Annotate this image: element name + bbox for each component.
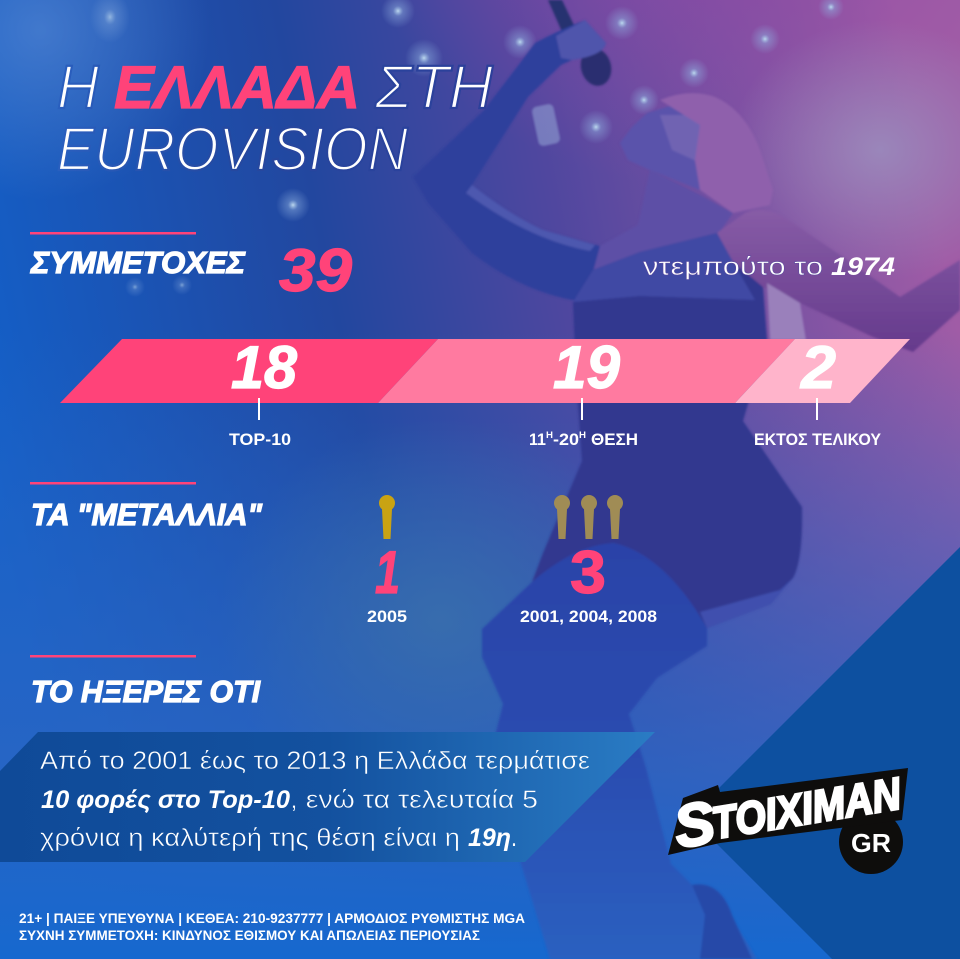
callout: did you know fact — [0, 732, 655, 862]
title: first line: ΣΤΗ — [374, 53, 494, 121]
right arm and hand — [717, 210, 960, 352]
heading: did you know: ΤΟ ΗΞΕΡΕΣ ΟΤΙ — [31, 674, 261, 709]
segment: out of final — [735, 339, 910, 403]
title: first line: ΕΛΛΑΔΑ — [114, 54, 360, 121]
skirt hem — [700, 578, 793, 628]
icons: bronze microphones — [554, 495, 623, 539]
raised arm — [413, 20, 606, 300]
bar labels — [229, 398, 881, 449]
logo: Stoiximan GR: TOIXIMAN — [708, 768, 905, 849]
responsible gaming footer — [19, 911, 525, 943]
callout: did you know fact: χρόνια η καλύτερή της θέση είναι η — [40, 824, 460, 852]
debut note: ντεμπούτο το — [643, 253, 823, 281]
label: out of final: ΕΚΤΟΣ ΤΕΛΙΚΟΥ — [754, 431, 881, 449]
dress — [532, 233, 802, 628]
dress lace — [767, 283, 806, 340]
label: 11th-20th place: ΘΕΣΗ — [591, 431, 638, 449]
singer silhouette — [413, 0, 960, 959]
title: first line — [57, 53, 494, 121]
debut note — [643, 253, 895, 281]
label: 11th-20th place: Η — [546, 430, 553, 441]
hand — [556, 20, 606, 60]
label: 11th-20th place: -20 — [553, 431, 579, 449]
participations count: 39 — [279, 237, 353, 304]
label: 11th-20th place: 11 — [529, 431, 546, 449]
title: first line: Η — [57, 53, 100, 121]
label: 11th-20th place: Η — [579, 430, 586, 441]
hair — [660, 93, 773, 213]
blue corner triangle — [690, 547, 960, 959]
callout: did you know fact: , ενώ τα τελευταία 5 — [290, 786, 538, 814]
neck and chest — [593, 170, 733, 272]
value 18: 18 — [231, 334, 298, 401]
dress bodice — [573, 233, 755, 302]
value 2: 2 — [800, 334, 836, 401]
face — [620, 103, 710, 190]
logo: Stoiximan GR: S — [669, 788, 720, 861]
responsible gaming footer: 21+ | ΠΑΙΞΕ ΥΠΕΥΘΥΝΑ | ΚΕΘΕΑ: 210-9237777 | ΑΡΜΟΔΙΟΣ ΡΥΘΜΙΣΤΗΣ MGA — [19, 911, 525, 926]
segment: top-10 — [60, 339, 438, 403]
logo: Stoiximan GR — [668, 758, 908, 874]
shoe — [692, 884, 752, 959]
segment: 11th-20th — [378, 339, 795, 403]
title: second line: EUROVISION — [57, 115, 409, 183]
gold year: 2005 — [367, 608, 407, 626]
segmented results bar — [60, 334, 910, 403]
label: 11th-20th place — [529, 430, 638, 449]
bronze count: 3 — [570, 539, 606, 606]
callout: did you know fact: 10 φορές στο Top-10 — [41, 786, 290, 814]
bronze years: 2001, 2004, 2008 — [520, 608, 657, 626]
callout: did you know fact: Από το 2001 έως το 2013 η Ελλάδα τερμάτισε — [40, 747, 590, 775]
callout: did you know fact: 19η — [468, 824, 511, 852]
callout: did you know fact: . — [511, 824, 517, 852]
lit cheek — [660, 115, 705, 165]
value 19: 19 — [553, 334, 621, 401]
upper arm highlight — [466, 185, 595, 251]
heading: medals: ΤΑ "ΜΕΤΑΛΛΙΑ" — [31, 497, 263, 532]
debut note: 1974 — [831, 253, 895, 281]
heading: participations: ΣΥΜΜΕΤΟΧΕΣ — [30, 245, 246, 280]
responsible gaming footer: ΣΥΧΝΗ ΣΥΜΜΕΤΟΧΗ: ΚΙΝΔΥΝΟΣ ΕΘΙΣΜΟΥ ΚΑΙ ΑΠΩΛΕΙΑΣ ΠΕΡΙΟΥΣΙΑΣ — [19, 928, 480, 943]
leg — [482, 543, 757, 959]
stage lights — [90, 0, 844, 297]
logo: Stoiximan GR: GR — [851, 828, 891, 858]
icon: gold microphone — [379, 495, 395, 539]
gold count: 1 — [375, 539, 400, 606]
section: medals — [30, 482, 657, 626]
microphone — [548, 0, 615, 89]
label: top-10: ΤΟΡ-10 — [229, 431, 291, 449]
section: participations — [30, 232, 895, 304]
title — [57, 53, 494, 183]
